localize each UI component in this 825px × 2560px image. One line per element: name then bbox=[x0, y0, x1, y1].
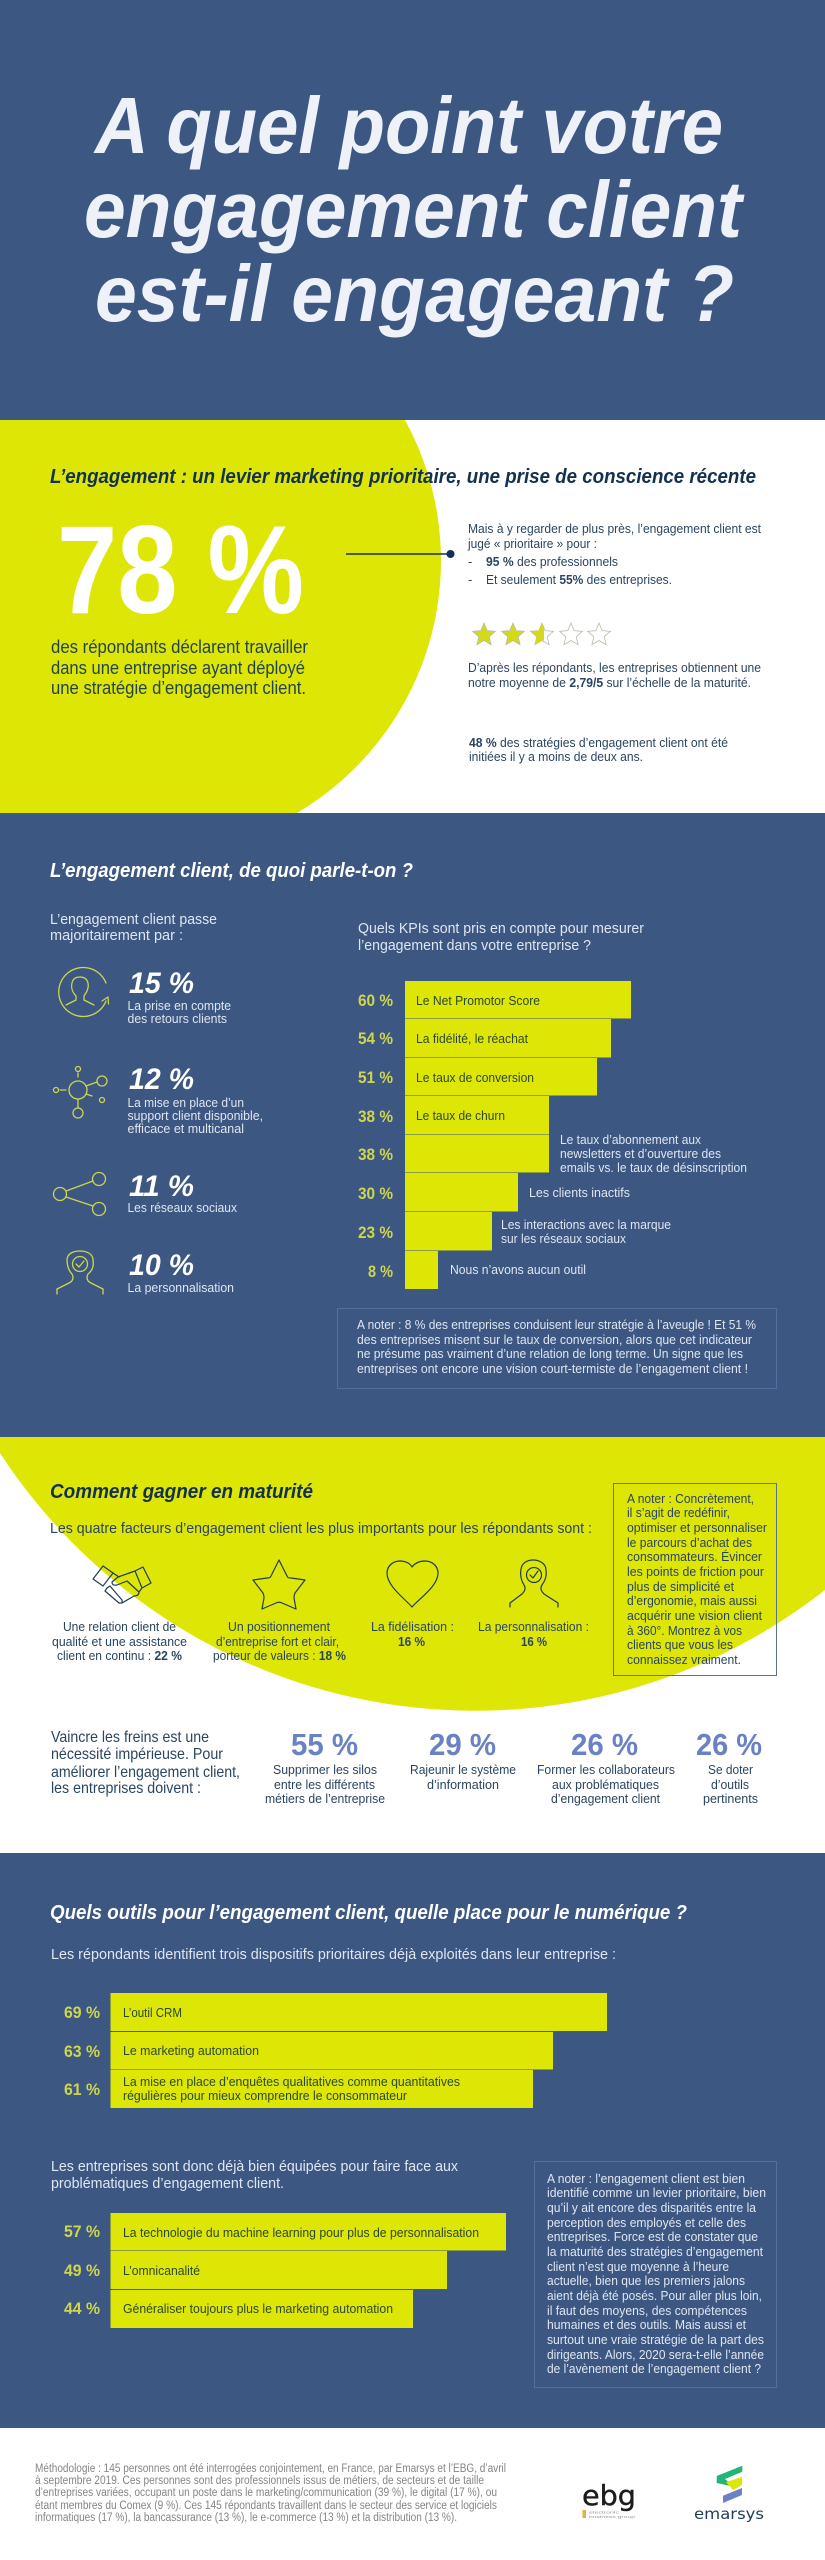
callout: concrètement note: A noter : Concrètement, bbox=[627, 1491, 754, 1506]
text: vaincre les freins: les entreprises doivent : bbox=[51, 1780, 201, 1797]
callout: 8 % note: entreprises ont encore une vision court-termiste de l’engagement client ! bbox=[357, 1361, 748, 1376]
panel: title header bbox=[0, 0, 825, 420]
callout: levier prioritaire note: aient déjà été posés. Pour aller plus loin, bbox=[547, 2288, 762, 2303]
text: méthodologie: étant membres du Comex (9 %). Ces 145 répondants travaillent dans le secteur des service et logiciels bbox=[35, 2500, 497, 2512]
callout: levier prioritaire note bbox=[534, 2162, 776, 2388]
bar chart: dispositifs: 63 % bbox=[64, 2042, 100, 2061]
text: maturity score: notre moyenne de 2,79/5 sur l’échelle de la maturité. bbox=[468, 675, 751, 690]
callout: concrètement note: clients que vous les bbox=[627, 1637, 733, 1652]
logo: emarsys bbox=[694, 2466, 764, 2523]
text: prioritaire: Mais à y regarder de plus près, l’engagement client est bbox=[468, 521, 761, 536]
stat: 29 %: d’information bbox=[427, 1777, 499, 1792]
icon: head with check bbox=[510, 1560, 558, 1607]
bar chart: KPIs: 30 % bbox=[358, 1184, 393, 1203]
title: engagement client bbox=[84, 165, 745, 254]
text: 78 % description: des répondants déclarent travailler bbox=[51, 637, 308, 657]
bar chart: KPIs: Le taux de churn bbox=[416, 1108, 505, 1123]
callout: levier prioritaire note: client n’est que moyenne à l’heure bbox=[547, 2259, 729, 2274]
stat: 15 %: La prise en compte bbox=[128, 998, 231, 1013]
bar chart: KPIs: Les interactions avec la marque bbox=[501, 1217, 671, 1232]
factor: relation client: qualité et une assistance bbox=[52, 1634, 187, 1649]
factor: personnalisation bbox=[478, 1560, 589, 1649]
factor: personnalisation: 16 % bbox=[521, 1634, 547, 1649]
title: est-il engageant ? bbox=[95, 249, 734, 338]
callout: 8 % note bbox=[338, 1308, 776, 1388]
heading: maturité: Comment gagner en maturité bbox=[50, 1481, 313, 1503]
icon: personalisation head bbox=[57, 1251, 103, 1294]
text: KPI question bbox=[358, 921, 644, 954]
factor: fidélisation bbox=[371, 1561, 454, 1649]
bar chart: KPIs: 23 % bbox=[358, 1223, 393, 1242]
bar chart: dispositifs: 61 % bbox=[64, 2080, 100, 2099]
text: recent strategies: initiées il y a moins de deux ans. bbox=[469, 749, 643, 764]
callout: levier prioritaire note: surtout une vraie stratégie de la part des bbox=[547, 2332, 764, 2347]
stat: 29 % bbox=[410, 1727, 516, 1792]
big number 78 %: 78 % bbox=[57, 501, 304, 640]
text: bien équipées: problématiques d’engagement client. bbox=[51, 2175, 284, 2192]
callout: concrètement note: connaissez vraiment. bbox=[627, 1652, 741, 1667]
bar chart: dispositifs bbox=[64, 1993, 607, 2108]
factor: positionnement: porteur de valeurs : 18 % bbox=[213, 1648, 346, 1663]
factor: relation client: client en continu : 22 % bbox=[57, 1648, 182, 1663]
icon: star outline bbox=[253, 1560, 305, 1609]
bar chart: technologies: 49 % bbox=[64, 2261, 100, 2280]
stat: 26 % outils: pertinents bbox=[703, 1791, 758, 1806]
factor: relation client: Une relation client de bbox=[63, 1619, 176, 1634]
icon: rating stars bbox=[473, 623, 610, 645]
text: intro left bbox=[50, 912, 217, 944]
stat: 10 %: La personnalisation bbox=[128, 1280, 234, 1295]
icon: handshake bbox=[93, 1566, 151, 1603]
bar chart: KPIs: Nous n’avons aucun outil bbox=[450, 1262, 586, 1277]
text: vaincre les freins: améliorer l’engagement client, bbox=[51, 1764, 240, 1781]
text: maturity score: D’après les répondants, les entreprises obtiennent une bbox=[468, 660, 761, 675]
bar chart: dispositifs: régulières pour mieux comprendre le consommateur bbox=[123, 2088, 408, 2103]
stat: 26 % collaborateurs: d’engagement client bbox=[551, 1791, 660, 1806]
callout: levier prioritaire note: A noter : l’engagement client est bien bbox=[547, 2171, 745, 2186]
callout: levier prioritaire note: identifié comme un levier prioritaire, bien bbox=[547, 2185, 766, 2200]
stat: 26 % collaborateurs: aux problématiques bbox=[552, 1777, 659, 1792]
factor: personnalisation: La personnalisation : bbox=[478, 1619, 589, 1634]
factor: positionnement: d’entreprise fort et clair, bbox=[216, 1634, 339, 1649]
stat: 26 % outils: Se doter bbox=[708, 1762, 754, 1777]
panel: de quoi parle-t-on bbox=[0, 813, 825, 1437]
text: méthodologie: à septembre 2019. Ces personnes sont des professionnels issus de métiers, de secteurs et de taille bbox=[35, 2475, 484, 2487]
bar chart: technologies bbox=[64, 2213, 506, 2328]
text: méthodologie: informatiques (17 %), la bancassurance (13 %), le e-commerce (13 %) et la distribution (13 %). bbox=[35, 2512, 457, 2524]
bar chart: KPIs: 60 % bbox=[358, 991, 393, 1010]
text: vaincre les freins: nécessité impérieuse. Pour bbox=[51, 1746, 224, 1763]
bar chart: KPIs: emails vs. le taux de désinscription bbox=[560, 1160, 747, 1175]
stat: 12 %: 12 % bbox=[129, 1063, 194, 1096]
text: méthodologie: d’entreprises variées, occupant un poste dans le marketing/communication (39 %), le digital (17 %), ou bbox=[35, 2487, 497, 2499]
text: bien équipées: Les entreprises sont donc déjà bien équipées pour faire face aux bbox=[51, 2158, 458, 2175]
bar chart: KPIs: La fidélité, le réachat bbox=[416, 1031, 528, 1046]
bar chart: dispositifs: La mise en place d’enquêtes qualitatives comme quantitatives bbox=[123, 2074, 460, 2089]
stat: 10 %: 10 % bbox=[129, 1249, 194, 1282]
callout: concrètement note bbox=[614, 1484, 776, 1676]
stat: 55 %: Supprimer les silos bbox=[273, 1762, 377, 1777]
text: prioritaire: jugé « prioritaire » pour : bbox=[467, 536, 597, 551]
callout: concrètement note: à 360°. Montrez à vos bbox=[627, 1623, 742, 1638]
bar chart: KPIs: Le taux d’abonnement aux bbox=[560, 1132, 701, 1147]
callout: 8 % note: des entreprises misent sur le taux de conversion, alors que cet indicateur bbox=[357, 1332, 753, 1347]
text: prioritaire: 95 % des professionnels bbox=[486, 554, 618, 569]
icon: heart outline bbox=[387, 1561, 438, 1607]
bar chart: KPIs: 38 % bbox=[358, 1107, 393, 1126]
stat: 12 %: support client disponible, bbox=[128, 1108, 263, 1123]
text: prioritaire: Et seulement 55% des entreprises. bbox=[486, 572, 672, 587]
factor: relation client bbox=[52, 1566, 187, 1663]
callout: levier prioritaire note: dirigeants. Alors, 2020 sera-t-elle l’année bbox=[547, 2347, 764, 2362]
title bbox=[84, 81, 745, 338]
bar chart: dispositifs: Le marketing automation bbox=[123, 2043, 259, 2058]
bar chart: technologies: 44 % bbox=[64, 2299, 100, 2318]
panel: outils et numérique bbox=[0, 1853, 825, 2428]
text: trois dispositifs: Les répondants identifient trois dispositifs prioritaires déjà exploités dans leur entreprise : bbox=[51, 1947, 616, 1963]
stat: 26 % collaborateurs: 26 % bbox=[571, 1727, 638, 1762]
callout: levier prioritaire note: actuelle, bien que les premiers jalons bbox=[547, 2273, 745, 2288]
bar chart: KPIs: Les clients inactifs bbox=[529, 1185, 630, 1200]
stat: 26 % collaborateurs: Former les collaborateurs bbox=[537, 1762, 675, 1777]
stat: 26 % collaborateurs bbox=[537, 1727, 675, 1806]
connector line with dot bbox=[346, 550, 454, 558]
stat: 11 % bbox=[54, 1170, 237, 1216]
factor: fidélisation: 16 % bbox=[398, 1634, 425, 1649]
title: A quel point votre bbox=[93, 81, 723, 170]
text: prioritaire: - bbox=[468, 572, 472, 587]
bar chart: KPIs: Le taux de conversion bbox=[416, 1070, 534, 1085]
logo: ebg: business group bbox=[589, 2514, 636, 2519]
callout: concrètement note: plus de simplicité et bbox=[627, 1579, 734, 1594]
text: maturity score bbox=[468, 660, 761, 690]
stat: 11 %: 11 % bbox=[129, 1170, 194, 1203]
text: intro left: majoritairement par : bbox=[50, 928, 183, 944]
text: intro left: L’engagement client passe bbox=[50, 912, 217, 928]
panel: engagement marketing lever bbox=[0, 420, 825, 813]
text: vaincre les freins bbox=[51, 1729, 240, 1797]
bar chart: dispositifs: L’outil CRM bbox=[123, 2005, 182, 2020]
stat: 29 %: 29 % bbox=[429, 1727, 496, 1762]
panel: footer bbox=[0, 2428, 825, 2560]
bar chart: dispositifs: 69 % bbox=[64, 2003, 100, 2022]
factor: positionnement bbox=[213, 1560, 346, 1663]
stat: 11 %: Les réseaux sociaux bbox=[128, 1200, 237, 1215]
text: quatre facteurs: Les quatre facteurs d’engagement client les plus importants pour les répondants sont : bbox=[50, 1521, 592, 1537]
heading: de quoi parle-t-on: L’engagement client, de quoi parle-t-on ? bbox=[50, 860, 413, 882]
bar chart: KPIs: 38 % bbox=[358, 1145, 393, 1164]
bar chart: technologies: 57 % bbox=[64, 2222, 100, 2241]
panel: comment gagner en maturité bbox=[0, 1437, 825, 1853]
stat: 26 % outils: d’outils bbox=[711, 1777, 749, 1792]
text: 78 % description bbox=[51, 637, 308, 698]
text: KPI question: Quels KPIs sont pris en compte pour mesurer bbox=[358, 921, 644, 937]
bar chart: KPIs: 54 % bbox=[358, 1029, 393, 1048]
callout: levier prioritaire note: il faut des moyens, des compétences bbox=[547, 2303, 747, 2318]
text: KPI question: l’engagement dans votre entreprise ? bbox=[358, 938, 591, 954]
text: recent strategies: 48 % des stratégies d’engagement client ont été bbox=[469, 735, 728, 750]
bar chart: KPIs: newsletters et d’ouverture des bbox=[560, 1146, 721, 1161]
stat: 10 % bbox=[57, 1249, 234, 1295]
text: méthodologie bbox=[35, 2463, 506, 2524]
bar chart: KPIs bbox=[358, 981, 747, 1289]
logo: ebg: ebg bbox=[582, 2479, 636, 2512]
stat: 55 %: entre les différents bbox=[274, 1777, 375, 1792]
stat: 55 %: 55 % bbox=[291, 1727, 358, 1762]
stat: 12 %: efficace et multicanal bbox=[128, 1121, 244, 1136]
callout: concrètement note: les points de friction pour bbox=[627, 1564, 765, 1579]
bar chart: technologies: Généraliser toujours plus le marketing automation bbox=[123, 2301, 393, 2316]
stat: 15 % bbox=[59, 967, 231, 1026]
callout: concrètement note: d’ergonomie, mais aussi bbox=[627, 1593, 757, 1608]
callout: concrètement note: consommateurs. Évincer bbox=[627, 1549, 763, 1564]
stat: 55 % bbox=[265, 1727, 385, 1806]
callout: concrètement note: le parcours d’achat des bbox=[627, 1535, 752, 1550]
stat: 15 %: 15 % bbox=[129, 967, 194, 1000]
bar chart: KPIs: 51 % bbox=[358, 1068, 393, 1087]
text: bien équipées bbox=[51, 2158, 458, 2192]
bar chart: KPIs: sur les réseaux sociaux bbox=[501, 1231, 626, 1246]
callout: levier prioritaire note: qu’il y ait encore des disparités entre la bbox=[547, 2200, 757, 2215]
stat: 26 % outils: 26 % bbox=[696, 1727, 762, 1762]
logo: emarsys: emarsys bbox=[694, 2505, 764, 2523]
text: méthodologie: Méthodologie : 145 personnes ont été interrogées conjointement, en France, par Emarsys et l’EBG, d’avril bbox=[35, 2463, 506, 2475]
factor: positionnement: Un positionnement bbox=[228, 1619, 330, 1634]
text: vaincre les freins: Vaincre les freins est une bbox=[51, 1729, 209, 1746]
icon: social share bbox=[54, 1172, 106, 1216]
heading: levier marketing: L’engagement : un levier marketing prioritaire, une prise de conscience récente bbox=[50, 466, 756, 488]
callout: concrètement note: optimiser et personnaliser bbox=[627, 1520, 768, 1535]
callout: levier prioritaire note: humaines et des outils. Mais aussi et bbox=[547, 2317, 746, 2332]
text: 78 % description: dans une entreprise ayant déployé bbox=[51, 658, 305, 678]
bar chart: technologies: L’omnicanalité bbox=[123, 2263, 200, 2278]
text: prioritaire: - bbox=[468, 554, 472, 569]
callout: levier prioritaire note: la maturité des stratégies d’engagement bbox=[547, 2244, 763, 2259]
callout: levier prioritaire note: entreprises. Force est de constater que bbox=[547, 2229, 758, 2244]
bar chart: KPIs: 8 % bbox=[368, 1262, 393, 1281]
stat: 26 % outils bbox=[696, 1727, 762, 1806]
heading: outils: Quels outils pour l’engagement client, quelle place pour le numérique ? bbox=[50, 1902, 687, 1924]
text: prioritaire bbox=[467, 521, 761, 587]
stat: 29 %: Rajeunir le système bbox=[410, 1762, 516, 1777]
callout: 8 % note: A noter : 8 % des entreprises conduisent leur stratégie à l’aveugle ! Et 51 % bbox=[357, 1317, 756, 1332]
icon: customer feedback loop bbox=[59, 968, 108, 1016]
logo: ebg: electronic bbox=[589, 2510, 619, 2514]
callout: levier prioritaire note: perception des employés et celle des bbox=[547, 2215, 746, 2230]
stat: 12 %: La mise en place d’un bbox=[128, 1095, 244, 1110]
factor: fidélisation: La fidélisation : bbox=[371, 1619, 454, 1634]
callout: levier prioritaire note: de l’avènement de l’engagement client ? bbox=[547, 2361, 761, 2376]
callout: concrètement note: il s’agit de redéfinir, bbox=[627, 1505, 730, 1520]
bar chart: technologies: La technologie du machine learning pour plus de personnalisation bbox=[123, 2225, 479, 2240]
bar chart: KPIs: Le Net Promotor Score bbox=[416, 993, 540, 1008]
text: recent strategies bbox=[469, 735, 728, 764]
stat: 15 %: des retours clients bbox=[128, 1011, 227, 1026]
text: 78 % description: une stratégie d’engagement client. bbox=[51, 678, 306, 698]
callout: 8 % note: ne présume pas vraiment d’une relation de long terme. Un signe que les bbox=[357, 1346, 743, 1361]
icon: network bbox=[54, 1066, 107, 1118]
stat: 12 % bbox=[54, 1063, 263, 1136]
callout: concrètement note: acquérir une vision client bbox=[627, 1608, 762, 1623]
stat: 55 %: métiers de l’entreprise bbox=[265, 1791, 385, 1806]
